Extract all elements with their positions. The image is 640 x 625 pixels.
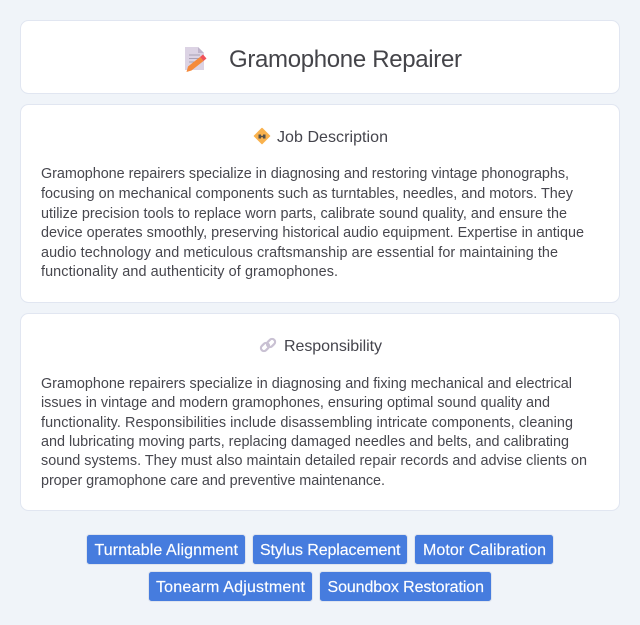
tag: Motor Calibration: Motor Calibration	[423, 542, 546, 559]
text block: job description: focusing on mechanical components such as turntables, needles, and motors. They	[41, 186, 574, 202]
text block: responsibility: and lubricating moving parts, replacing damaged needles and belts, and calibrating	[41, 434, 569, 450]
tag: Tonearm Adjustment	[148, 572, 312, 602]
text block: job description: audio technology and meticulous craftsmanship are essential for maintaining the	[41, 245, 558, 261]
text block: responsibility: Gramophone repairers specialize in diagnosing and fixing mechanical and electrical	[41, 376, 572, 392]
tag: Soundbox Restoration	[320, 572, 492, 602]
panel: responsibility	[20, 314, 620, 510]
text block: responsibility: functionality. Responsibilities include disassembling intricate components, cleaning	[41, 415, 573, 431]
text block: job description: functionality and authenticity of gramophones.	[41, 264, 338, 280]
text block: responsibility	[41, 376, 587, 489]
text block: responsibility: proper gramophone care and preventive maintenance.	[41, 473, 385, 489]
text block: job description: device operates smoothly, preserving historical audio equipment. Expertise in antique	[41, 225, 584, 241]
text block: responsibility: issues in vintage and modern gramophones, ensuring optimal sound quality and	[41, 395, 550, 411]
text block: responsibility: sound systems. They must also maintain detailed repair records and advise clients on	[41, 453, 587, 469]
text block: job description: utilize precision tools to replace worn parts, calibrate sound quality, and ensure the	[41, 206, 567, 222]
skill tags	[86, 534, 554, 602]
heading: Job Description: Job Description	[277, 129, 388, 146]
icon: orange diamond	[254, 128, 270, 144]
heading: Responsibility: Responsibility	[284, 338, 382, 355]
icon: document with pencil	[185, 47, 206, 72]
panel: title	[20, 20, 620, 94]
tag: Stylus Replacement	[252, 534, 408, 564]
tag: Soundbox Restoration: Soundbox Restoration	[328, 579, 484, 596]
heading: Gramophone Repairer: Gramophone Repairer	[229, 46, 462, 73]
tag: Turntable Alignment: Turntable Alignment	[94, 542, 239, 559]
tag: Tonearm Adjustment: Tonearm Adjustment	[156, 579, 306, 596]
icon: chain link	[260, 338, 276, 352]
panel: job description	[20, 104, 620, 302]
text block: job description: Gramophone repairers specialize in diagnosing and restoring vintage phonographs,	[41, 166, 569, 182]
tag: Stylus Replacement: Stylus Replacement	[260, 542, 401, 559]
tag: Turntable Alignment	[86, 534, 246, 564]
tag: Motor Calibration	[414, 534, 554, 564]
text block: job description	[41, 166, 584, 280]
